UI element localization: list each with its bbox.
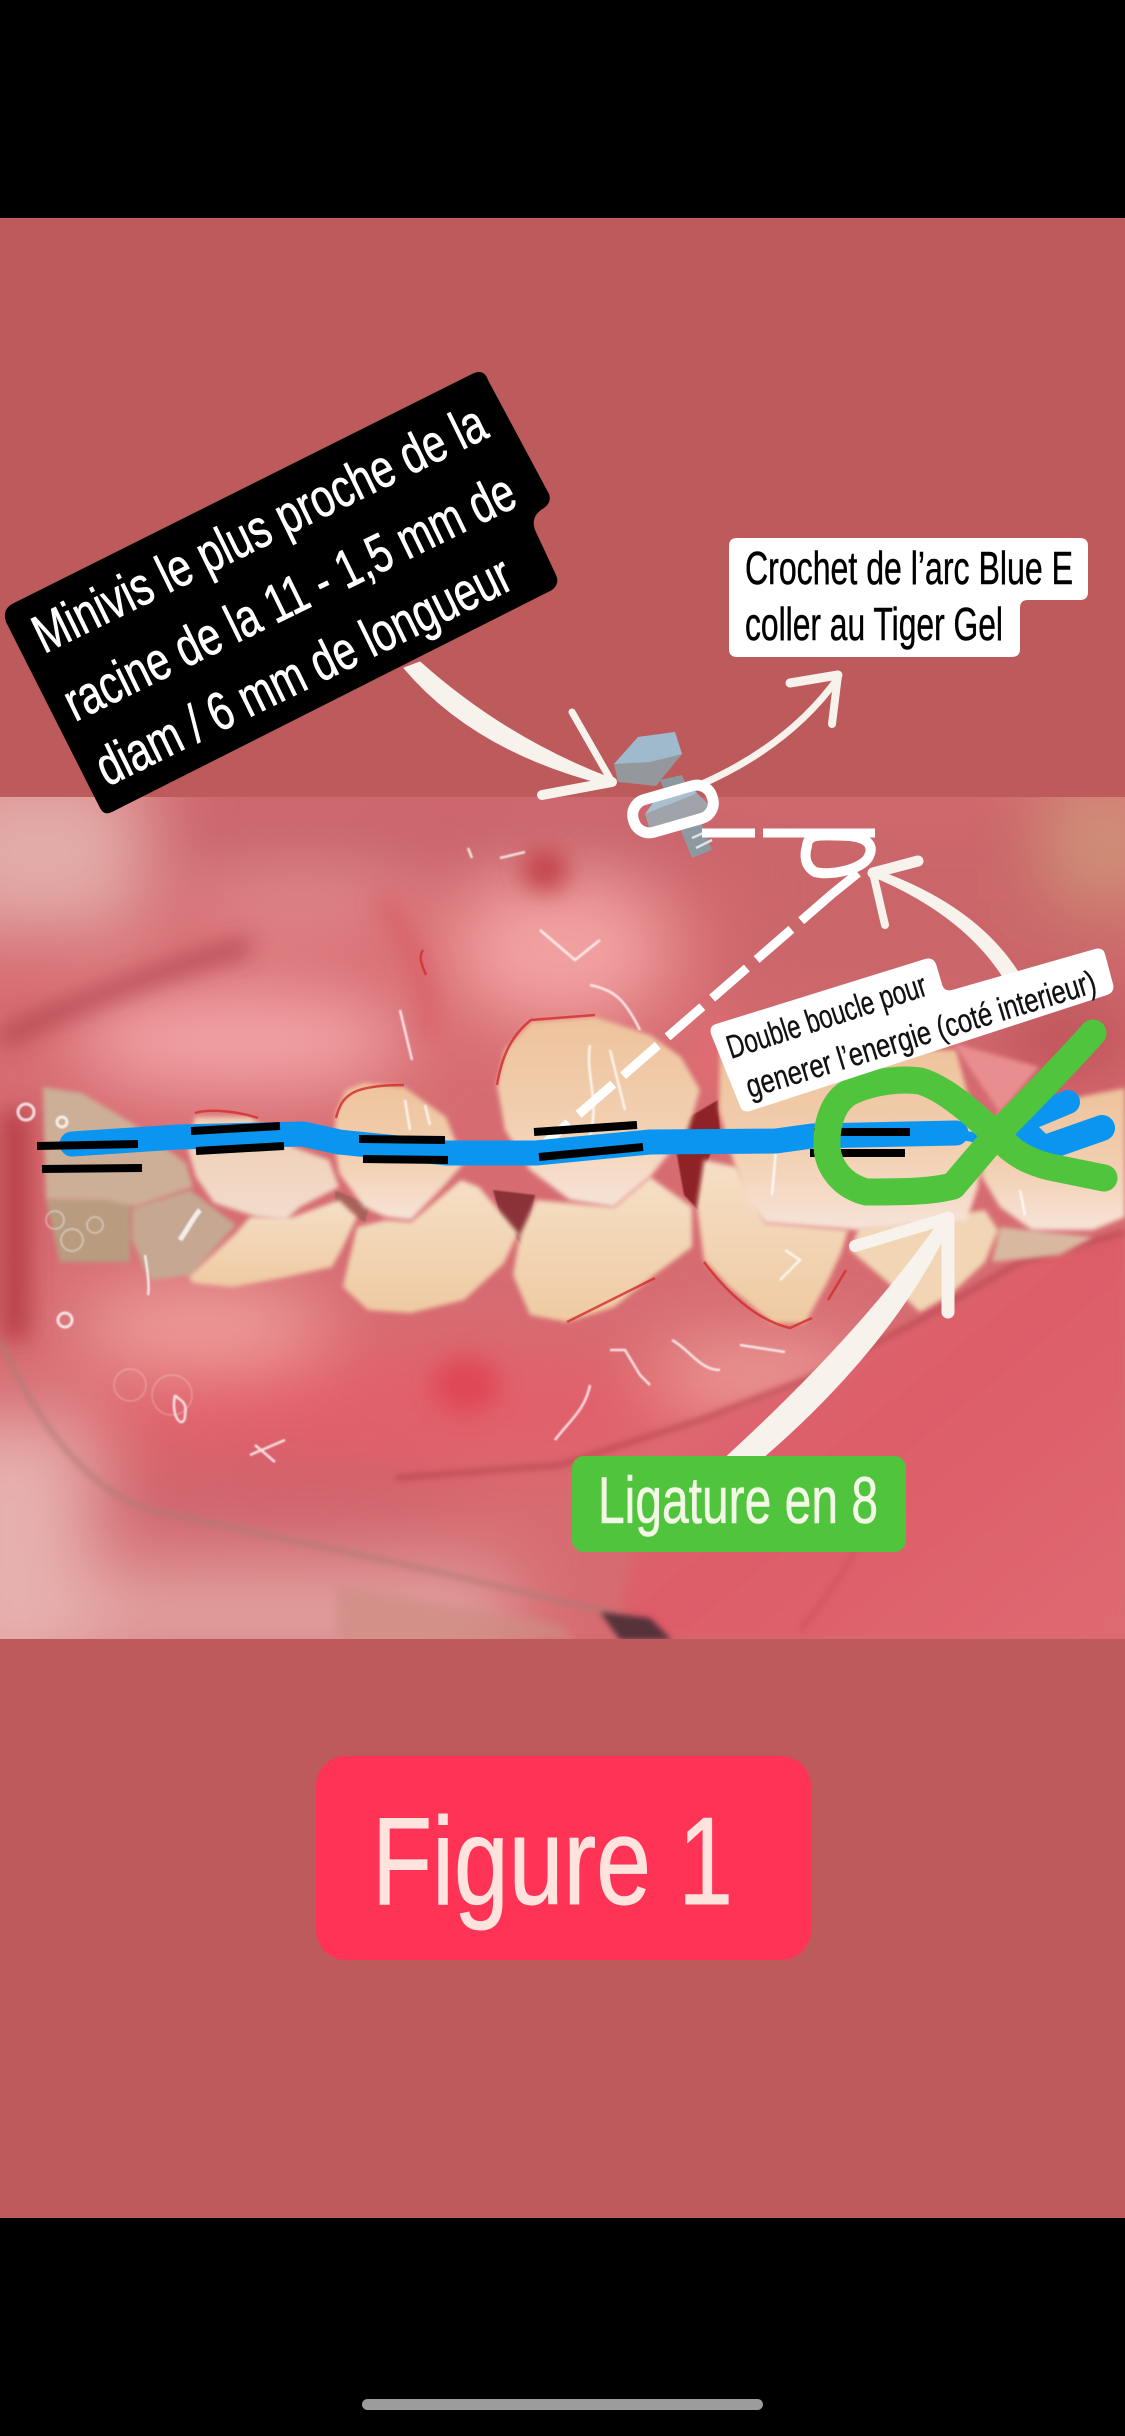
black callout: Minivis: racine de la 11 - 1,5 mm de bbox=[54, 462, 525, 733]
arrow: screw to Crochet callout bbox=[702, 675, 838, 784]
lower lip right bbox=[620, 1232, 1125, 1640]
icon: screw minivis bbox=[614, 732, 712, 858]
arrow: ligature label to figure-8 bbox=[728, 1218, 950, 1456]
blue arch wire bbox=[72, 1102, 1102, 1153]
dark interdental gaps bbox=[672, 1100, 720, 1210]
white callout: Crochet: coller au Tiger Gel bbox=[745, 598, 1003, 650]
black callout: Minivis: diam / 6 mm de longueur bbox=[86, 544, 521, 798]
upper teeth bbox=[43, 1017, 1125, 1230]
arrow: minivis callout to screw bbox=[404, 662, 612, 795]
white callout: double boucle: Double boucle pour bbox=[722, 966, 931, 1066]
title: Figure 1: Figure 1 bbox=[372, 1793, 733, 1931]
clinical photo of teeth bbox=[0, 770, 1125, 1680]
lower teeth bbox=[46, 1160, 1093, 1323]
brackets: black ties bbox=[37, 1125, 910, 1169]
wet lip line lower left bbox=[0, 1340, 650, 1622]
white loop and dashed wire bbox=[534, 781, 875, 1153]
white callout: Crochet bbox=[729, 538, 1088, 657]
green callout: Ligature en 8 bbox=[572, 1456, 906, 1552]
green callout: Ligature en 8: Ligature en 8 bbox=[598, 1463, 878, 1537]
green figure-8 ligature bbox=[827, 1033, 1104, 1192]
arrow: double loop callout to hook bbox=[872, 861, 1018, 980]
gum triangle between incisors bbox=[953, 1043, 1039, 1113]
home indicator bar bbox=[362, 2399, 763, 2410]
specular highlights bbox=[18, 848, 1025, 1462]
title: Figure 1 bbox=[316, 1756, 811, 1960]
black callout: Minivis bbox=[5, 372, 557, 813]
gingival margins bbox=[195, 950, 846, 1328]
black callout: Minivis: Minivis le plus proche de la bbox=[23, 393, 497, 665]
